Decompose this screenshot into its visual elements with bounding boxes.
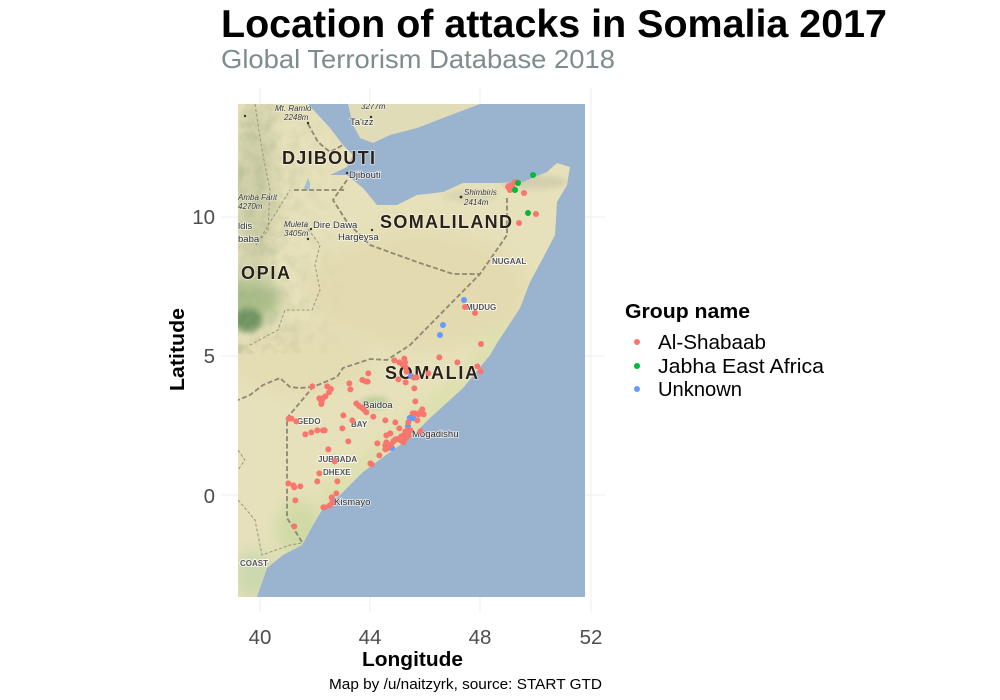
data points: Jabha East Africa <box>512 172 536 216</box>
caption: Map by /u/naitzyrk, source: START GTD <box>329 676 602 693</box>
map labels: Kismayo <box>334 497 370 508</box>
x axis tick labels: 48 <box>469 626 491 649</box>
y axis tick labels: 5 <box>204 345 215 368</box>
subtitle: Global Terrorism Database 2018 <box>221 44 615 74</box>
plot gridlines <box>221 88 605 612</box>
map labels: baba <box>238 234 260 245</box>
map labels: 2414m <box>463 198 489 207</box>
legend item: Unknown: Unknown <box>658 378 742 401</box>
legend title: Group name <box>625 301 750 323</box>
land: Yemen <box>348 104 480 143</box>
map labels: Ta'izz <box>350 117 374 128</box>
map labels: DJIBOUTI <box>282 148 375 168</box>
map labels: Shimbiris <box>464 188 497 197</box>
map labels: Mogadishu <box>412 429 458 440</box>
map labels: DHEXE <box>323 468 351 477</box>
legend item: Jabha East Africa: Jabha East Africa <box>658 355 825 378</box>
y axis tick labels: 10 <box>192 206 215 229</box>
map labels: Hargeysa <box>338 232 379 243</box>
map labels: 2248m <box>283 113 309 122</box>
land: Horn of Africa <box>238 104 570 597</box>
terrain shading <box>220 100 567 599</box>
map labels: Muleta <box>284 220 309 229</box>
map labels: COAST <box>240 559 268 568</box>
map labels: Amba Farit <box>237 193 278 202</box>
sea <box>238 104 585 597</box>
data points: Al-Shabaab <box>285 179 539 529</box>
map labels: NUGAAL <box>492 257 526 266</box>
map labels: 3277m <box>361 102 386 111</box>
x axis tick labels: 44 <box>359 626 381 649</box>
map labels: GEDO <box>297 417 321 426</box>
map labels: Djibouti <box>349 170 381 181</box>
map labels: BAY <box>351 420 368 429</box>
legend <box>625 301 825 401</box>
map labels <box>237 102 526 568</box>
borders <box>238 124 507 542</box>
lake shapes <box>304 178 310 191</box>
map labels: 4270m <box>238 202 263 211</box>
y axis tick labels <box>192 206 215 508</box>
legend item: Al-Shabaab: Al-Shabaab <box>658 331 766 354</box>
x axis tick labels: 40 <box>249 626 271 649</box>
map labels: Mt. Ramlo <box>275 104 312 113</box>
map labels: Dire Dawa <box>313 220 358 231</box>
x axis title: Longitude <box>362 648 463 671</box>
y axis tick labels: 0 <box>204 485 215 508</box>
map labels: SOMALIA <box>385 363 478 383</box>
map labels: Baidoa <box>363 400 393 411</box>
map labels: MUDUG <box>466 303 496 312</box>
map labels: SOMALILAND <box>380 212 512 232</box>
map labels: 3405m <box>284 229 309 238</box>
map labels: JUBBADA <box>318 455 357 464</box>
map <box>220 100 585 599</box>
map place dots <box>244 115 462 240</box>
x axis tick labels: 52 <box>580 626 602 649</box>
data points: Unknown <box>329 297 467 501</box>
title: Location of attacks in Somalia 2017 <box>221 3 887 46</box>
map labels: OPIA <box>241 263 290 283</box>
y axis title: Latitude <box>166 308 189 391</box>
map labels: ldis <box>238 221 253 232</box>
x axis tick labels <box>249 626 602 649</box>
